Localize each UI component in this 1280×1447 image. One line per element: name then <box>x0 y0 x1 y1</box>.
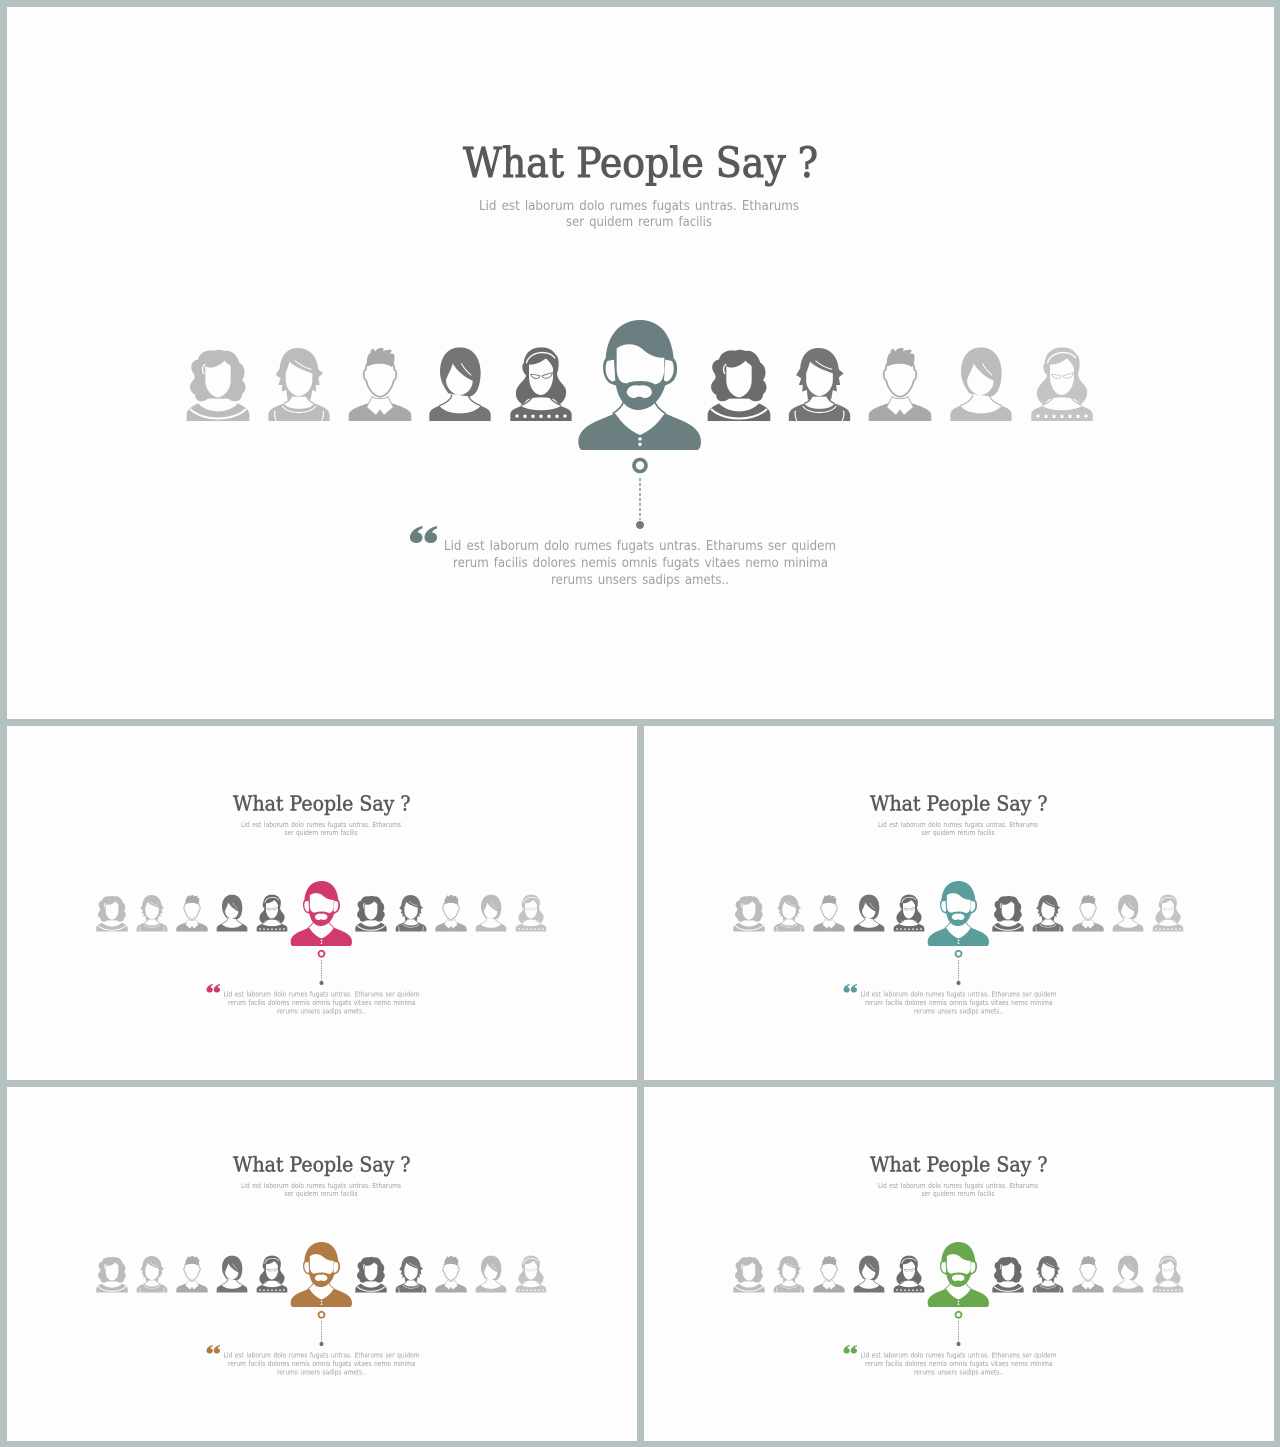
icon: woman with bob <box>217 1256 247 1292</box>
subtitle: ser quidem rerum facilis <box>284 1190 358 1198</box>
icon: curly-haired woman <box>708 350 770 421</box>
connector: ring, dashed line, dot <box>956 951 962 985</box>
icon: curly-haired woman <box>96 1257 128 1292</box>
quote text: rerum facilis dolores nemis omnis fugats vitaes nemo minima <box>865 1360 1052 1368</box>
subtitle: Lid est laborum dolo rumes fugats untras. Etharums <box>241 1182 401 1190</box>
icon: curly-haired woman <box>187 350 249 421</box>
icon: spiky-haired woman <box>268 348 330 421</box>
icon: man with collar <box>869 348 931 421</box>
icon: curly-haired woman <box>355 1257 387 1292</box>
quote text: rerum facilis dolores nemis omnis fugats vitaes nemo minima <box>228 999 416 1007</box>
subtitle: Lid est laborum dolo rumes fugats untras. Etharums <box>878 821 1038 829</box>
avatar row <box>96 1242 546 1307</box>
subtitle: ser quidem rerum facilis <box>566 214 712 230</box>
quote text <box>860 1352 1056 1376</box>
avatar row <box>187 320 1093 450</box>
connector: ring, dashed line, dot <box>318 1312 324 1346</box>
subtitle: Lid est laborum dolo rumes fugats untras. Etharums <box>878 1182 1038 1190</box>
quote text: rerums unsers sadips amets.. <box>551 572 729 588</box>
quote text: Lid est laborum dolo rumes fugats untras. Etharums ser quidem <box>224 990 420 998</box>
icon: man with collar <box>435 1256 467 1292</box>
title: What People Say ? <box>233 1152 410 1176</box>
subtitle <box>878 821 1038 837</box>
quote text: Lid est laborum dolo rumes fugats untras. Etharums ser quidem <box>860 990 1056 998</box>
icon: woman with bob <box>854 895 884 931</box>
icon: curly-haired woman <box>96 896 128 931</box>
connector: ring, dashed line, dot <box>956 1312 962 1346</box>
icon: quotation mark <box>844 1345 857 1354</box>
panel: pink variant <box>7 726 637 1080</box>
title: What People Say ? <box>870 792 1048 816</box>
icon: quotation mark <box>206 984 220 992</box>
icon: woman with glasses <box>1153 1256 1183 1292</box>
quote text: rerums unsers sadips amets.. <box>277 1008 366 1016</box>
quote text: rerum facilis dolores nemis omnis fugats vitaes nemo minima <box>228 1360 416 1368</box>
icon: quotation mark <box>844 984 857 992</box>
connector: ring, dashed line, dot <box>634 460 646 529</box>
icon: woman with glasses <box>894 895 924 931</box>
quote text <box>444 538 836 588</box>
icon: man with collar <box>1072 895 1104 931</box>
avatar row <box>733 881 1183 946</box>
quote text: rerums unsers sadips amets.. <box>277 1368 366 1376</box>
subtitle <box>241 821 401 837</box>
icon: spiky-haired woman <box>774 1256 804 1292</box>
subtitle: ser quidem rerum facilis <box>922 1190 995 1198</box>
quote text: rerum facilis dolores nemis omnis fugats vitaes nemo minima <box>865 999 1052 1007</box>
icon: woman with bob <box>950 347 1012 421</box>
icon: curly-haired woman <box>992 1257 1024 1292</box>
panel: main slide (slate) <box>7 7 1274 719</box>
subtitle: ser quidem rerum facilis <box>284 829 358 837</box>
icon: woman with bob <box>429 347 491 421</box>
panel: brown variant <box>7 1087 637 1441</box>
connector: ring, dashed line, dot <box>318 951 324 985</box>
title: What People Say ? <box>463 139 818 187</box>
title: What People Say ? <box>233 792 410 816</box>
icon: man with collar <box>813 1256 845 1292</box>
icon: curly-haired woman <box>733 1257 765 1292</box>
icon: man with collar <box>349 348 411 421</box>
icon: spiky-haired woman <box>396 1256 426 1292</box>
subtitle <box>878 1182 1038 1198</box>
icon: woman with glasses <box>1031 347 1093 421</box>
icon: woman with glasses <box>257 1256 287 1292</box>
icon: woman with glasses <box>516 895 546 931</box>
quote text: Lid est laborum dolo rumes fugats untras. Etharums ser quidem <box>860 1352 1056 1360</box>
icon: woman with bob <box>1113 895 1143 931</box>
icon: featured bearded man <box>928 1242 989 1307</box>
quote text: rerums unsers sadips amets.. <box>914 1368 1003 1376</box>
icon: woman with bob <box>854 1256 884 1292</box>
icon: spiky-haired woman <box>1033 1256 1063 1292</box>
icon: man with collar <box>1072 1256 1104 1292</box>
subtitle <box>479 198 799 230</box>
avatar row <box>733 1242 1183 1307</box>
icon: curly-haired woman <box>992 896 1024 931</box>
avatar row <box>96 881 546 946</box>
icon: woman with glasses <box>516 1256 546 1292</box>
subtitle: Lid est laborum dolo rumes fugats untras. Etharums <box>479 198 799 214</box>
icon: featured bearded man <box>291 1242 352 1307</box>
icon: woman with glasses <box>510 347 572 421</box>
subtitle: ser quidem rerum facilis <box>922 829 995 837</box>
quote text <box>224 990 420 1016</box>
quote text: Lid est laborum dolo rumes fugats untras. Etharums ser quidem <box>444 538 836 554</box>
icon: woman with glasses <box>257 895 287 931</box>
quote text: rerum facilis dolores nemis omnis fugats vitaes nemo minima <box>453 555 828 571</box>
quote text <box>860 990 1056 1016</box>
icon: spiky-haired woman <box>774 895 804 931</box>
icon: woman with bob <box>476 895 506 931</box>
icon: featured bearded man <box>928 881 989 946</box>
subtitle: Lid est laborum dolo rumes fugats untras. Etharums <box>241 821 401 829</box>
icon: spiky-haired woman <box>396 895 426 931</box>
icon: curly-haired woman <box>733 896 765 931</box>
icon: man with collar <box>813 895 845 931</box>
quote text <box>224 1352 420 1376</box>
icon: woman with bob <box>476 1256 506 1292</box>
icon: quotation mark <box>206 1345 220 1354</box>
icon: woman with bob <box>1113 1256 1143 1292</box>
icon: woman with bob <box>217 895 247 931</box>
icon: spiky-haired woman <box>137 1256 167 1292</box>
icon: spiky-haired woman <box>1033 895 1063 931</box>
icon: man with collar <box>176 1256 208 1292</box>
icon: man with collar <box>176 895 208 931</box>
icon: curly-haired woman <box>355 896 387 931</box>
quote text: Lid est laborum dolo rumes fugats untras. Etharums ser quidem <box>224 1352 420 1360</box>
panel: green variant <box>644 1087 1274 1441</box>
icon: spiky-haired woman <box>137 895 167 931</box>
icon: woman with glasses <box>894 1256 924 1292</box>
subtitle <box>241 1182 401 1198</box>
icon: spiky-haired woman <box>789 348 850 421</box>
icon: quotation mark <box>410 526 437 543</box>
icon: featured bearded man <box>578 320 701 450</box>
icon: man with collar <box>435 895 467 931</box>
icon: woman with glasses <box>1153 895 1183 931</box>
panel: teal variant <box>644 726 1274 1080</box>
quote text: rerums unsers sadips amets.. <box>914 1008 1003 1016</box>
title: What People Say ? <box>870 1152 1048 1176</box>
icon: featured bearded man <box>291 881 352 946</box>
